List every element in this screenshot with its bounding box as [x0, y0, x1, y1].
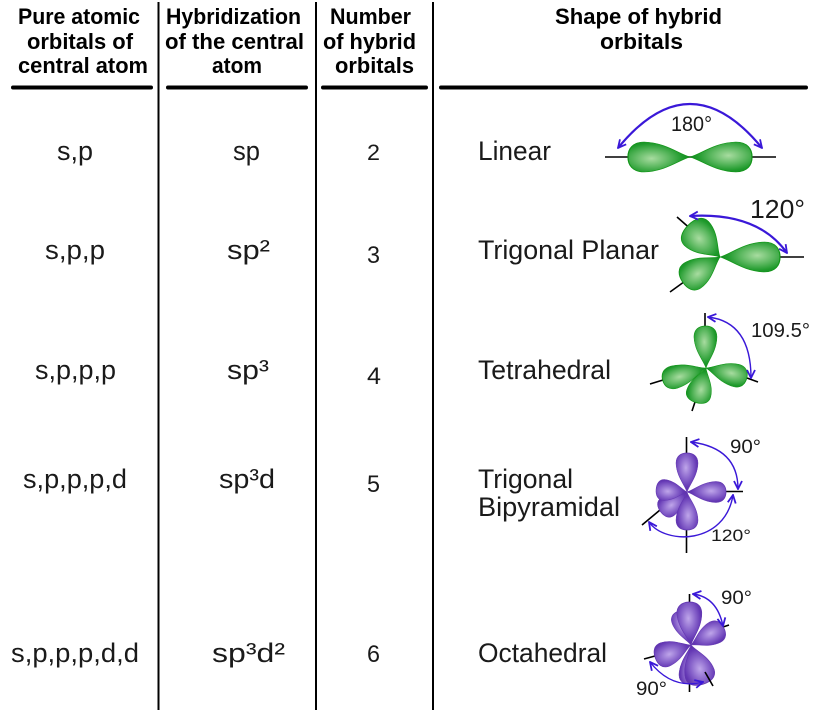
row: tetrahedral: 4	[367, 363, 381, 390]
row: trigonal bipyramidal: s,p,p,p,d	[23, 464, 127, 494]
row: octahedral: s,p,p,p,d,d	[11, 638, 139, 668]
row: linear: 2	[367, 140, 380, 165]
heading: number of hybrid orbitals	[323, 4, 416, 78]
row: trigonal planar	[45, 235, 659, 269]
row: trigonal bipyramidal: sp³d	[219, 464, 275, 494]
row: trigonal planar: 3	[367, 242, 380, 269]
row: linear: sp	[233, 136, 260, 166]
heading: pure atomic orbitals: central atom	[18, 53, 148, 78]
heading: hybridization: atom	[212, 53, 262, 78]
row: tetrahedral	[35, 355, 611, 390]
icon: tetrahedral orbitals 109.5 degrees: 109.5°	[751, 320, 810, 342]
row: tetrahedral: Tetrahedral	[478, 355, 611, 385]
row: trigonal planar: sp²	[227, 235, 270, 265]
icon: trigonal planar orbitals 120 degrees: 120°	[750, 194, 805, 224]
row: trigonal bipyramidal: 5	[367, 471, 380, 498]
icon: octahedral orbitals	[636, 588, 752, 700]
icon: octahedral orbitals: 90°	[636, 679, 667, 700]
heading: hybridization: Hybridization	[166, 4, 301, 29]
row: octahedral	[11, 638, 607, 668]
row: tetrahedral: s,p,p,p	[35, 355, 116, 385]
row: octahedral: 6	[367, 641, 380, 668]
icon: trigonal bipyramidal orbitals: 120°	[711, 526, 751, 545]
row: trigonal bipyramidal: Bipyramidal	[478, 492, 620, 522]
heading: pure atomic orbitals: orbitals of	[27, 29, 134, 54]
heading: hybridization	[165, 4, 304, 78]
row: linear: s,p	[57, 136, 93, 166]
row: trigonal bipyramidal: Trigonal	[478, 464, 573, 494]
heading: shape of hybrid orbitals: orbitals	[600, 29, 683, 54]
icon: octahedral orbitals: 90°	[721, 588, 752, 609]
heading: hybridization: of the central	[165, 29, 304, 54]
row: tetrahedral: sp³	[227, 355, 269, 385]
heading: number of hybrid orbitals: Number	[330, 4, 411, 29]
row: trigonal bipyramidal	[23, 464, 620, 522]
icon: trigonal planar orbitals 120 degrees	[670, 194, 805, 295]
icon: trigonal bipyramidal orbitals: 90°	[730, 437, 761, 458]
row: linear: Linear	[478, 136, 551, 166]
heading: shape of hybrid orbitals	[555, 4, 722, 54]
row: octahedral: sp³d²	[212, 638, 285, 668]
icon: linear orbitals 180 degrees	[605, 104, 776, 172]
icon: linear orbitals 180 degrees: 180°	[671, 113, 712, 136]
icon: tetrahedral orbitals 109.5 degrees	[650, 313, 810, 411]
heading: shape of hybrid orbitals: Shape of hybrid	[555, 4, 722, 29]
row: trigonal planar: Trigonal Planar	[478, 235, 659, 265]
heading: number of hybrid orbitals: orbitals	[335, 53, 414, 78]
icon: trigonal bipyramidal orbitals	[642, 437, 761, 553]
row: octahedral: Octahedral	[478, 638, 607, 668]
row: trigonal planar: s,p,p	[45, 235, 105, 265]
row: linear	[57, 136, 551, 166]
heading: pure atomic orbitals: Pure atomic	[18, 4, 140, 29]
heading: pure atomic orbitals	[18, 4, 148, 78]
heading: number of hybrid orbitals: of hybrid	[323, 29, 416, 54]
